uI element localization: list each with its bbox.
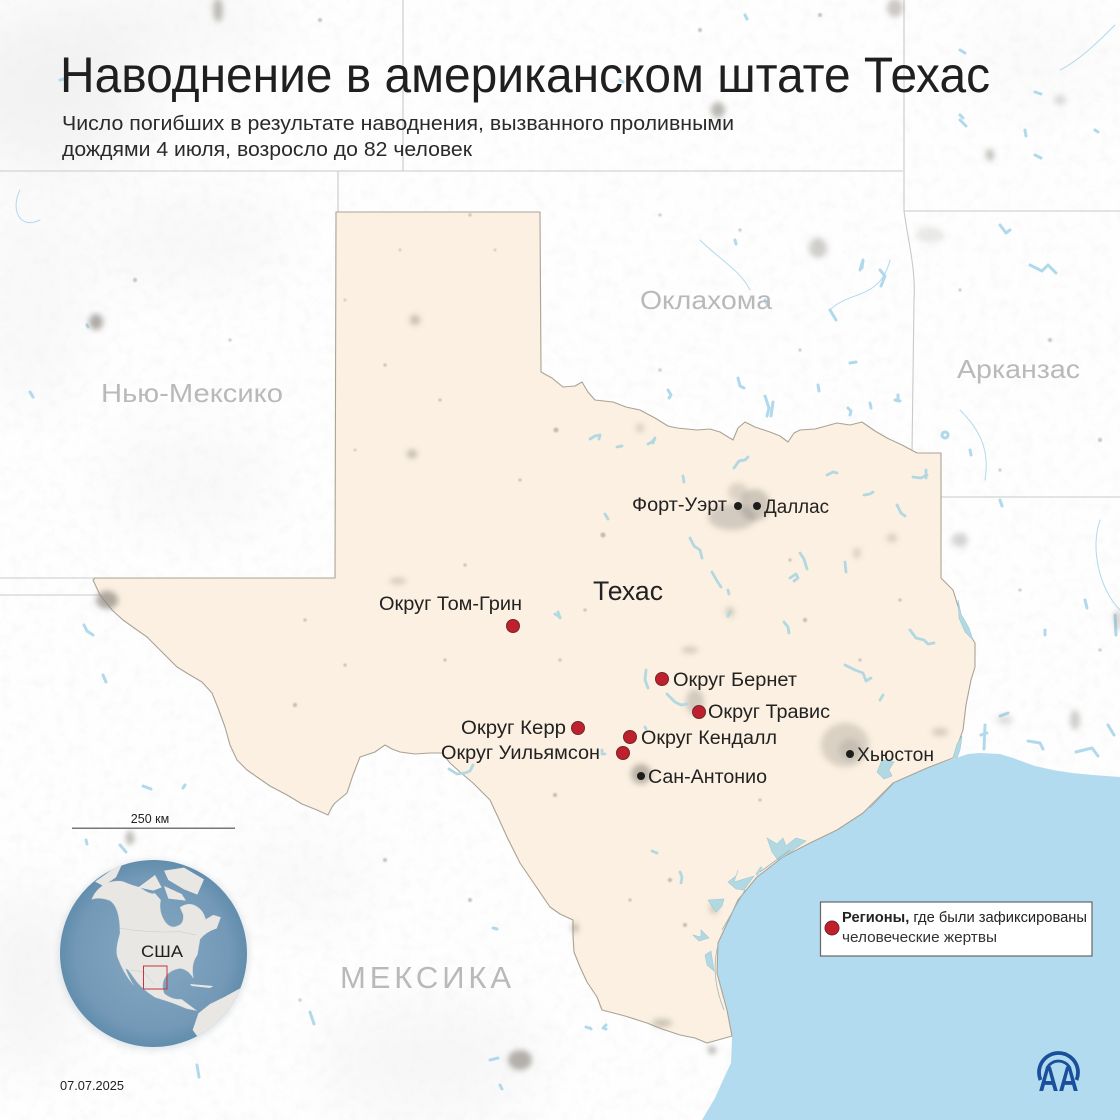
legend: Регионы, где были зафиксированы xyxy=(842,910,1087,926)
city labels: Даллас xyxy=(764,497,829,518)
barrier islands xyxy=(715,782,895,1010)
texas state shape xyxy=(93,212,975,1043)
label: Mexico: МЕКСИКА xyxy=(340,960,511,995)
subtitle: Число погибших в результате наводнения, вызванного проливными xyxy=(62,113,734,135)
label: New Mexico: Нью-Мексико xyxy=(101,378,283,408)
county labels: Округ Том-Грин xyxy=(379,594,522,615)
globe land: Caribbean and Asia edge xyxy=(95,862,213,988)
city labels: Сан-Антонио xyxy=(648,767,767,788)
county labels: Округ Бернет xyxy=(673,670,797,691)
coastal bays xyxy=(693,600,973,971)
texas lakes and rivers xyxy=(449,435,934,883)
state borders xyxy=(0,0,1120,595)
county labels xyxy=(379,594,830,764)
locator globe xyxy=(58,859,250,1051)
gulf of mexico xyxy=(702,753,1120,1120)
globe land: South America xyxy=(192,988,240,1036)
county labels: Округ Керр xyxy=(461,718,566,739)
city markers xyxy=(637,502,854,780)
logo: Anadolu Agency: AA xyxy=(1038,1060,1078,1099)
city labels: Хьюстон xyxy=(857,745,934,766)
logo: Anadolu Agency xyxy=(1038,1053,1078,1099)
county labels: Округ Кендалл xyxy=(641,728,777,749)
date: 07.07.2025 xyxy=(60,1079,124,1093)
globe borders xyxy=(120,928,197,985)
globe land: Arctic islands xyxy=(138,868,204,901)
scale bar: 250 км xyxy=(131,812,169,826)
city labels xyxy=(632,495,934,788)
title: Наводнение в американском штате Техас xyxy=(60,47,990,103)
county labels: Округ Травис xyxy=(708,702,830,723)
label: Oklahoma: Оклахома xyxy=(640,285,773,315)
label: Texas: Техас xyxy=(593,576,663,606)
legend: человеческие жертвы xyxy=(842,930,997,946)
subtitle xyxy=(62,113,734,161)
subtitle: дождями 4 июля, возросло до 82 человек xyxy=(62,139,472,161)
neighbouring region labels xyxy=(101,285,1080,995)
globe locator box xyxy=(144,966,167,989)
county labels: Округ Уильямсон xyxy=(441,743,600,764)
globe label: США xyxy=(141,942,184,961)
label: Arkansas: Арканзас xyxy=(957,354,1080,384)
globe land: North America xyxy=(92,881,221,1011)
county markers xyxy=(506,620,706,760)
legend xyxy=(820,902,1092,956)
city labels: Форт-Уэрт xyxy=(632,495,727,516)
